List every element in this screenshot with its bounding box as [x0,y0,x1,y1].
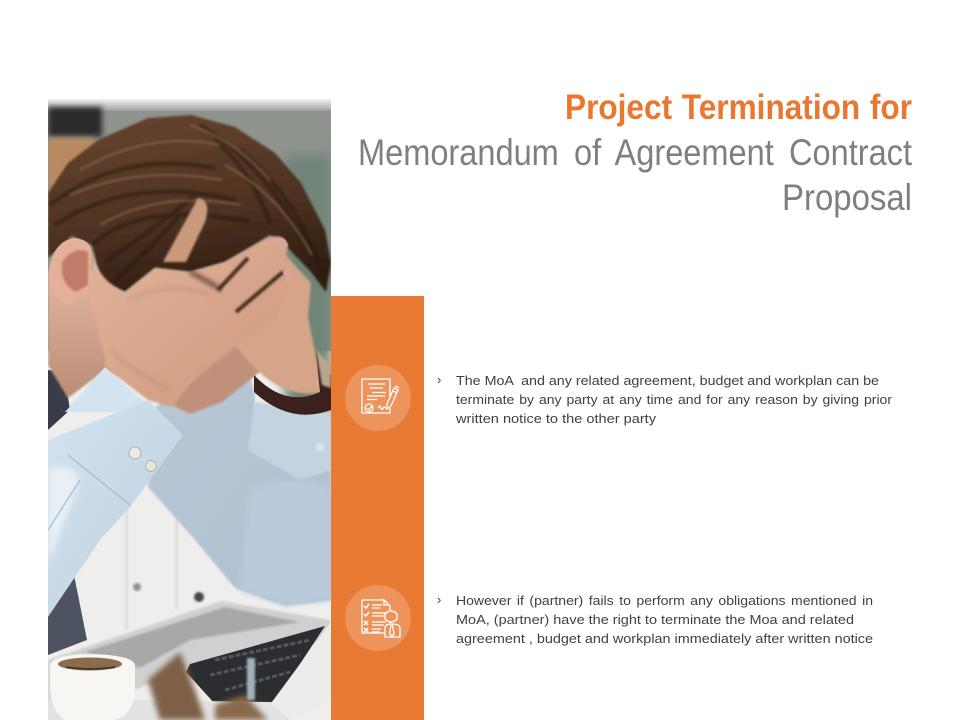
neck [48,269,117,399]
front sleeve and cuff [48,400,183,617]
text block: first clause: › [437,372,441,387]
coffee cup [50,654,135,720]
text block: second clause: However if (partner) fails to perform any obligations mentioned in [456,593,873,608]
back hand and watch [232,250,331,415]
text block: second clause: MoA, (partner) have the right to terminate the Moa and related [456,612,854,627]
text block: first clause [437,372,893,426]
title [358,88,913,218]
dark trousers and tie [48,370,87,655]
text block: first clause: terminate by any party at any time and for any reason by giving prior [456,392,893,407]
back sleeve and chest [147,378,331,608]
blurred desk objects [148,652,268,720]
text block: second clause [437,592,873,646]
icon badge circle [345,365,411,431]
office background [48,99,331,720]
laptop [48,601,331,720]
panel: orange sidebar [331,296,424,720]
front hand [90,236,292,407]
icon badge circle [345,585,411,651]
icon: checklist with person [345,585,411,651]
text block: first clause: The MoA and any related agreement, budget and workplan can be [456,373,879,388]
text block: second clause: agreement , budget and workplan immediately after written notice [456,631,873,646]
title line: grey 2: Proposal [782,177,912,218]
title line: orange: Project Termination for [565,88,912,127]
text block: second clause: › [437,592,441,607]
icon: signed contract with pen [345,365,411,431]
hair [48,115,331,292]
collar [65,367,144,412]
text block: first clause: written notice to the other party [455,411,657,426]
face shadow under hands [172,340,262,414]
photo: stressed man at laptop [48,99,331,720]
ear [49,238,92,306]
